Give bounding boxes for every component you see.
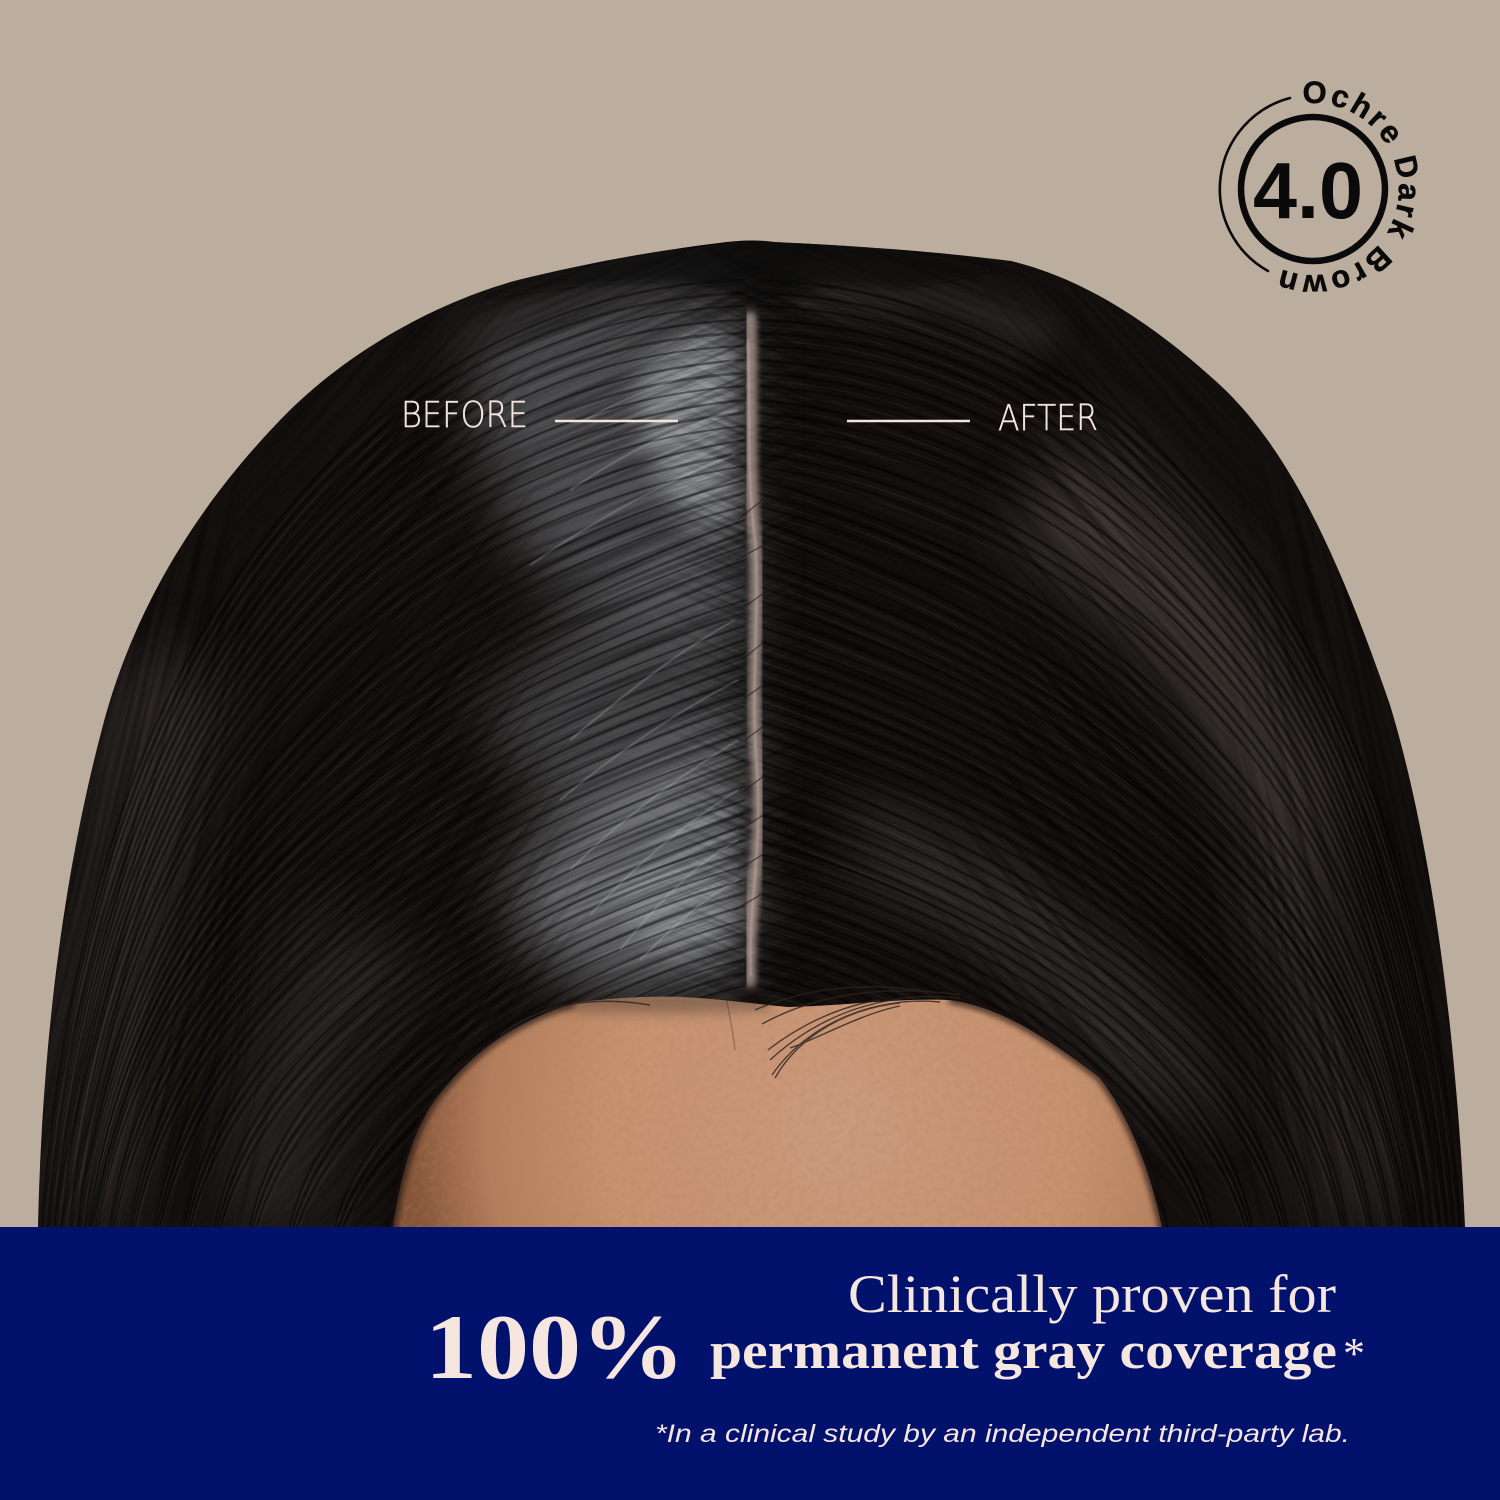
hair: outer sheen on both sides xyxy=(50,269,1420,1227)
shade badge: Ochre Dark Brown xyxy=(1280,81,1418,292)
hair: fine texture left xyxy=(40,242,795,1227)
hair: dark crown cap xyxy=(498,240,944,296)
forehead edge softening xyxy=(392,1000,1163,1232)
label: before: BEFORE xyxy=(401,395,528,436)
asterisk: * xyxy=(1343,1329,1365,1378)
shade badge xyxy=(1218,81,1418,292)
headline line 2: permanent gray coverage xyxy=(710,1323,1337,1380)
footnote: *In a clinical study by an independent third-party lab. xyxy=(655,1420,1350,1448)
stat: 100%: 100% xyxy=(425,1296,685,1398)
forehead skin xyxy=(380,990,1180,1230)
label: after: AFTER xyxy=(998,398,1098,439)
hair: fine texture right xyxy=(668,240,1464,1227)
hair silhouette xyxy=(38,240,1465,1227)
hair: right side strand shading xyxy=(757,280,1460,1260)
headline line 1: Clinically proven for xyxy=(848,1264,1336,1324)
bottom banner xyxy=(0,1227,1500,1500)
hair: left side strand shading xyxy=(42,280,745,1260)
scalp part line xyxy=(735,318,772,980)
hair: silver strands near the part xyxy=(530,360,738,960)
hair: gray roots (before side) xyxy=(470,284,740,990)
hairline wisps xyxy=(500,987,960,1078)
shade badge: 4.0 xyxy=(1253,146,1363,235)
